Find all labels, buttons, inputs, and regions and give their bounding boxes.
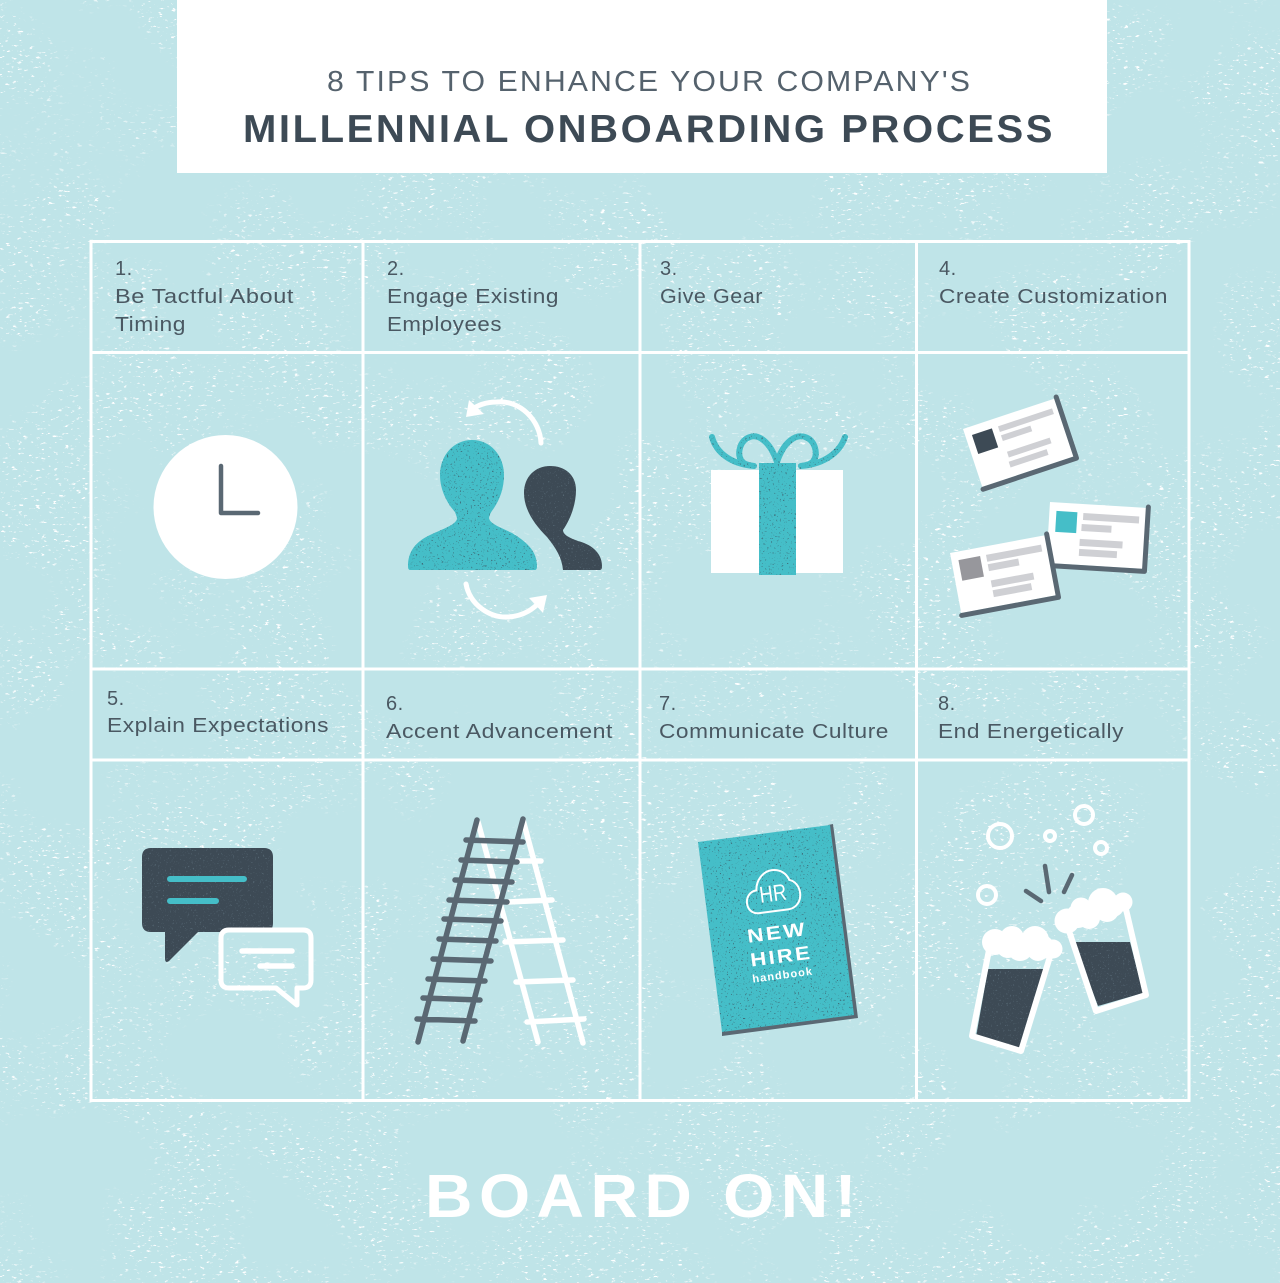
heading: tip 5: Explain Expectations	[107, 715, 329, 737]
heading: tip 1	[115, 258, 294, 336]
heading: tip 8: 8.	[938, 693, 956, 715]
icon: clock	[154, 435, 298, 579]
panel: tip 7	[659, 693, 889, 1036]
panel: tip 2	[387, 258, 602, 617]
title line 2: MILLENNIAL ONBOARDING PROCESS	[243, 108, 1055, 151]
grid of table lines	[91, 241, 1189, 1101]
panel: tip 4	[939, 258, 1168, 615]
icon: gift box	[711, 436, 845, 575]
heading: tip 7	[659, 693, 889, 743]
icon: ladders	[417, 819, 584, 1043]
heading: tip 8: End Energetically	[938, 721, 1124, 743]
heading: tip 1: Be Tactful About	[115, 286, 294, 308]
card top	[963, 397, 1077, 489]
heading: tip 6	[386, 693, 613, 743]
panel: tip 1	[115, 258, 298, 579]
heading: tip 2: Employees	[387, 314, 502, 336]
panel: tip 6	[386, 693, 613, 1043]
icon: people exchanging	[408, 400, 602, 617]
icon: speech bubbles	[142, 848, 311, 1005]
heading: tip 1: 1.	[115, 258, 133, 280]
heading: tip 3	[660, 258, 763, 308]
HR logo: HR	[758, 879, 788, 908]
heading: tip 4: 4.	[939, 258, 957, 280]
heading: tip 7: 7.	[659, 693, 677, 715]
heading: tip 2: Engage Existing	[387, 286, 559, 308]
heading: tip 6: Accent Advancement	[386, 721, 613, 743]
icon: clinking beers	[972, 806, 1146, 1051]
heading: tip 7: Communicate Culture	[659, 721, 889, 743]
panel: tip 5	[107, 688, 329, 1005]
icon: handbook: HIRE	[749, 943, 813, 972]
title banner	[177, 0, 1107, 173]
heading: tip 3: Give Gear	[660, 286, 763, 308]
closing message: BOARD ON!	[425, 1162, 863, 1230]
panel: tip 8	[938, 693, 1146, 1051]
card right	[1046, 501, 1148, 571]
icon: business cards	[950, 397, 1148, 615]
icon: handbook	[698, 824, 858, 1036]
heading: tip 1: Timing	[115, 314, 186, 336]
card left	[950, 534, 1058, 615]
heading: tip 5: 5.	[107, 688, 125, 710]
panel: tip 3	[660, 258, 845, 575]
heading: tip 5	[107, 688, 329, 737]
title line 1: 8 TIPS TO ENHANCE YOUR COMPANY'S	[327, 66, 972, 98]
heading: tip 4	[939, 258, 1168, 308]
heading: tip 3: 3.	[660, 258, 678, 280]
heading: tip 6: 6.	[386, 693, 404, 715]
heading: tip 2: 2.	[387, 258, 405, 280]
heading: tip 8	[938, 693, 1124, 743]
heading: tip 4: Create Customization	[939, 286, 1168, 308]
handbook title: NEW	[746, 919, 808, 948]
heading: tip 2	[387, 258, 559, 336]
icon: handbook: handbook	[752, 966, 814, 986]
